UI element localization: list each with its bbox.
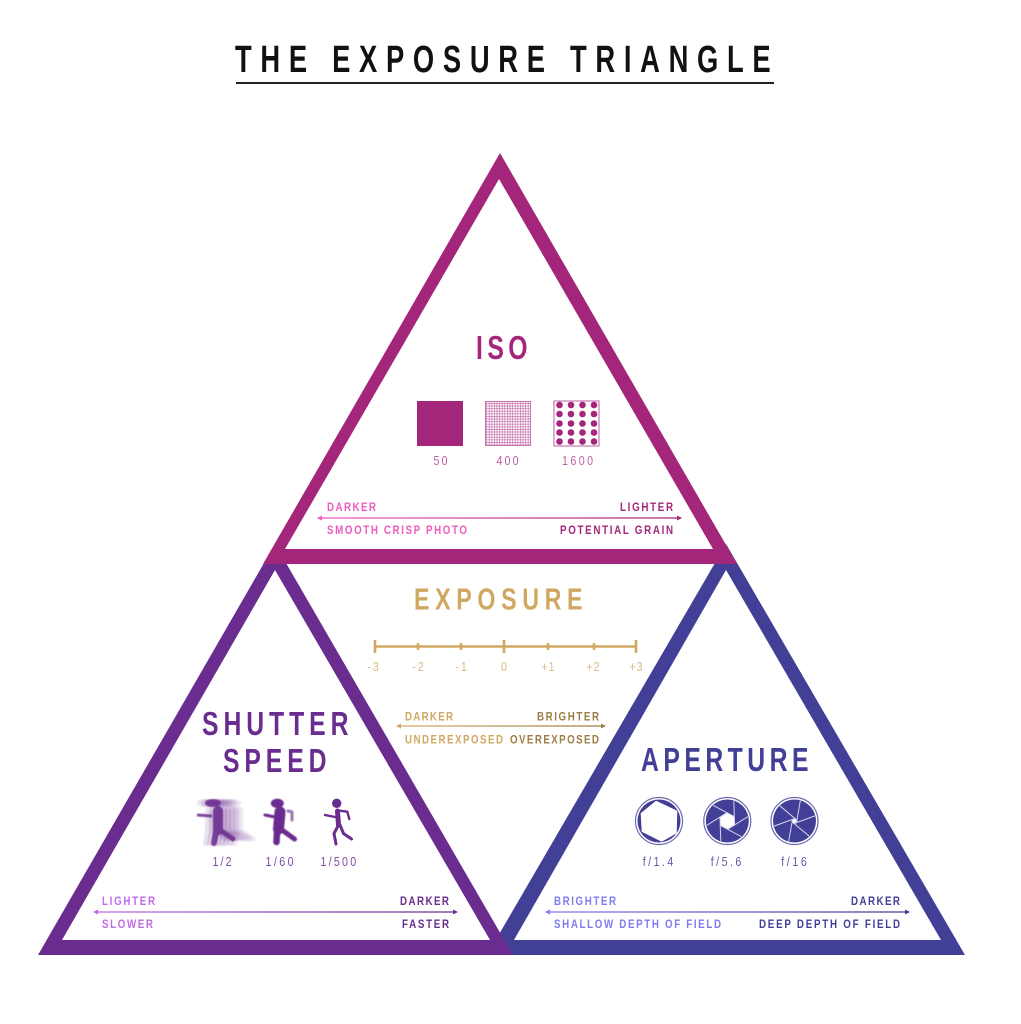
exposure stop labels: [367, 660, 643, 674]
exposure stop labels: +2: [586, 660, 600, 674]
exposure direction scale: OVEREXPOSED: [510, 734, 599, 747]
ISO scale: POTENTIAL GRAIN: [560, 524, 673, 537]
shutter value labels: [212, 855, 356, 869]
aperture scale: DARKER: [851, 895, 900, 908]
exposure direction scale: UNDEREXPOSED: [405, 734, 503, 747]
heading: shutter speed: [202, 707, 348, 780]
icon: iris f/16: [771, 798, 818, 844]
exposure stop labels: -3: [367, 660, 379, 674]
shutter scale: DARKER: [400, 895, 449, 908]
panel: exposure: [367, 581, 643, 747]
aperture scale: BRIGHTER: [554, 895, 616, 908]
icon: blurred runner 1/2: [197, 799, 253, 843]
icon: iris f/5.6: [704, 798, 751, 844]
triangle: aperture frame: [487, 544, 965, 955]
shutter value labels: 1/2: [212, 855, 232, 869]
heading: exposure: EXPOSURE: [414, 581, 583, 616]
aperture scale: SHALLOW DEPTH OF FIELD: [554, 918, 721, 931]
ISO scale: [317, 501, 682, 537]
panel: aperture: [545, 743, 910, 931]
ISO scale: DARKER: [327, 501, 376, 514]
icon: iris f/1.4: [636, 798, 682, 844]
heading: shutter speed: SPEED: [223, 744, 327, 780]
shutter scale: [93, 895, 458, 931]
exposure scale: [375, 640, 636, 653]
heading: ISO: ISO: [476, 331, 528, 367]
triangle: shutter speed frame: [38, 544, 513, 955]
title: THE EXPOSURE TRIANGLE: [235, 39, 771, 81]
aperture value labels: f/1.4: [643, 855, 674, 869]
icon: ISO 1600 swatch: [554, 401, 599, 446]
triangle: ISO frame: [263, 153, 737, 564]
icon: ISO 400 swatch: [486, 402, 530, 446]
panel: ISO: [317, 331, 682, 537]
aperture value labels: [643, 855, 807, 869]
aperture scale: DEEP DEPTH OF FIELD: [759, 918, 900, 931]
icon: runner 1/60: [265, 799, 294, 842]
ISO value labels: 1600: [562, 454, 593, 468]
icon: ISO 50 swatch: [417, 401, 463, 446]
heading: shutter speed: SHUTTER: [202, 707, 348, 743]
exposure stop labels: 0: [501, 660, 507, 674]
exposure direction scale: DARKER: [405, 711, 453, 724]
ISO value labels: [433, 454, 593, 468]
ISO value labels: 400: [496, 454, 519, 468]
exposure direction scale: BRIGHTER: [537, 711, 599, 724]
aperture scale: [545, 895, 910, 931]
heading: aperture: APERTURE: [641, 743, 808, 779]
exposure direction scale: [396, 711, 606, 747]
aperture value labels: f/5.6: [711, 855, 741, 869]
shutter scale: SLOWER: [102, 918, 153, 931]
ISO value labels: 50: [433, 454, 448, 468]
ISO scale: LIGHTER: [620, 501, 673, 514]
panel: shutter speed: [93, 707, 458, 931]
aperture value labels: f/16: [781, 855, 807, 869]
exposure stop labels: -2: [412, 660, 424, 674]
shutter scale: LIGHTER: [102, 895, 155, 908]
shutter value labels: 1/500: [320, 855, 356, 869]
exposure stop labels: -1: [455, 660, 467, 674]
shutter value labels: 1/60: [265, 855, 294, 869]
icon: sharp runner 1/500: [325, 799, 352, 844]
exposure stop labels: +3: [629, 660, 643, 674]
exposure stop labels: +1: [541, 660, 555, 674]
shutter scale: FASTER: [402, 918, 449, 931]
ISO scale: SMOOTH CRISP PHOTO: [327, 524, 467, 537]
